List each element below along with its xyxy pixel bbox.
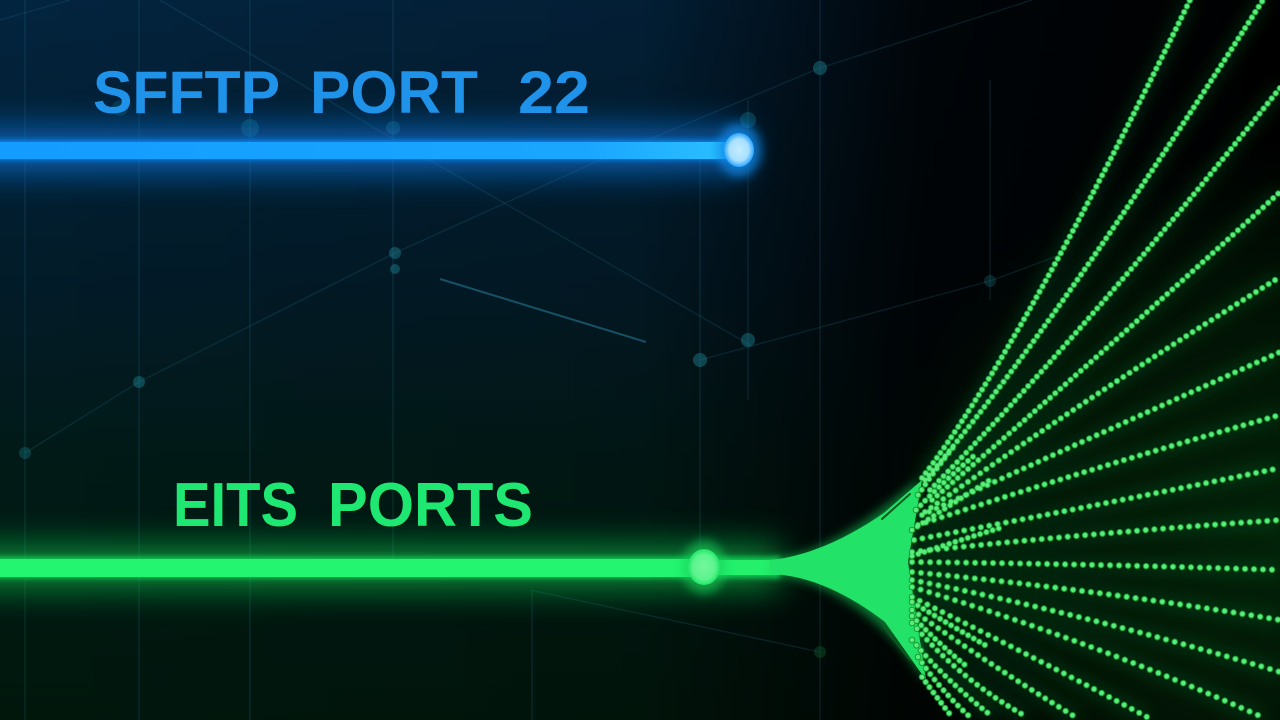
blue connection line bbox=[0, 123, 761, 177]
funnel bbox=[770, 478, 926, 682]
dotted fan: soft glow bbox=[912, 0, 1280, 718]
title: FTPS ports: EITS bbox=[173, 471, 298, 540]
green line glow bbox=[0, 545, 780, 589]
green connection line bbox=[0, 540, 780, 594]
blue endpoint node bbox=[717, 123, 761, 177]
title: SFTP port 22: 22 bbox=[518, 59, 590, 126]
title: SFTP port 22: SFFTP bbox=[93, 59, 280, 126]
funnel slits bbox=[882, 494, 910, 660]
title: FTPS ports: PORTS bbox=[328, 471, 533, 540]
green node bbox=[682, 540, 726, 594]
title: SFTP port 22: PORT bbox=[310, 59, 478, 126]
title: FTPS ports bbox=[173, 471, 533, 540]
blue line glow bbox=[0, 128, 745, 172]
dotted fan of data streams bbox=[912, 0, 1280, 718]
title: SFTP port 22 bbox=[93, 59, 590, 126]
network nodes bbox=[19, 61, 996, 658]
